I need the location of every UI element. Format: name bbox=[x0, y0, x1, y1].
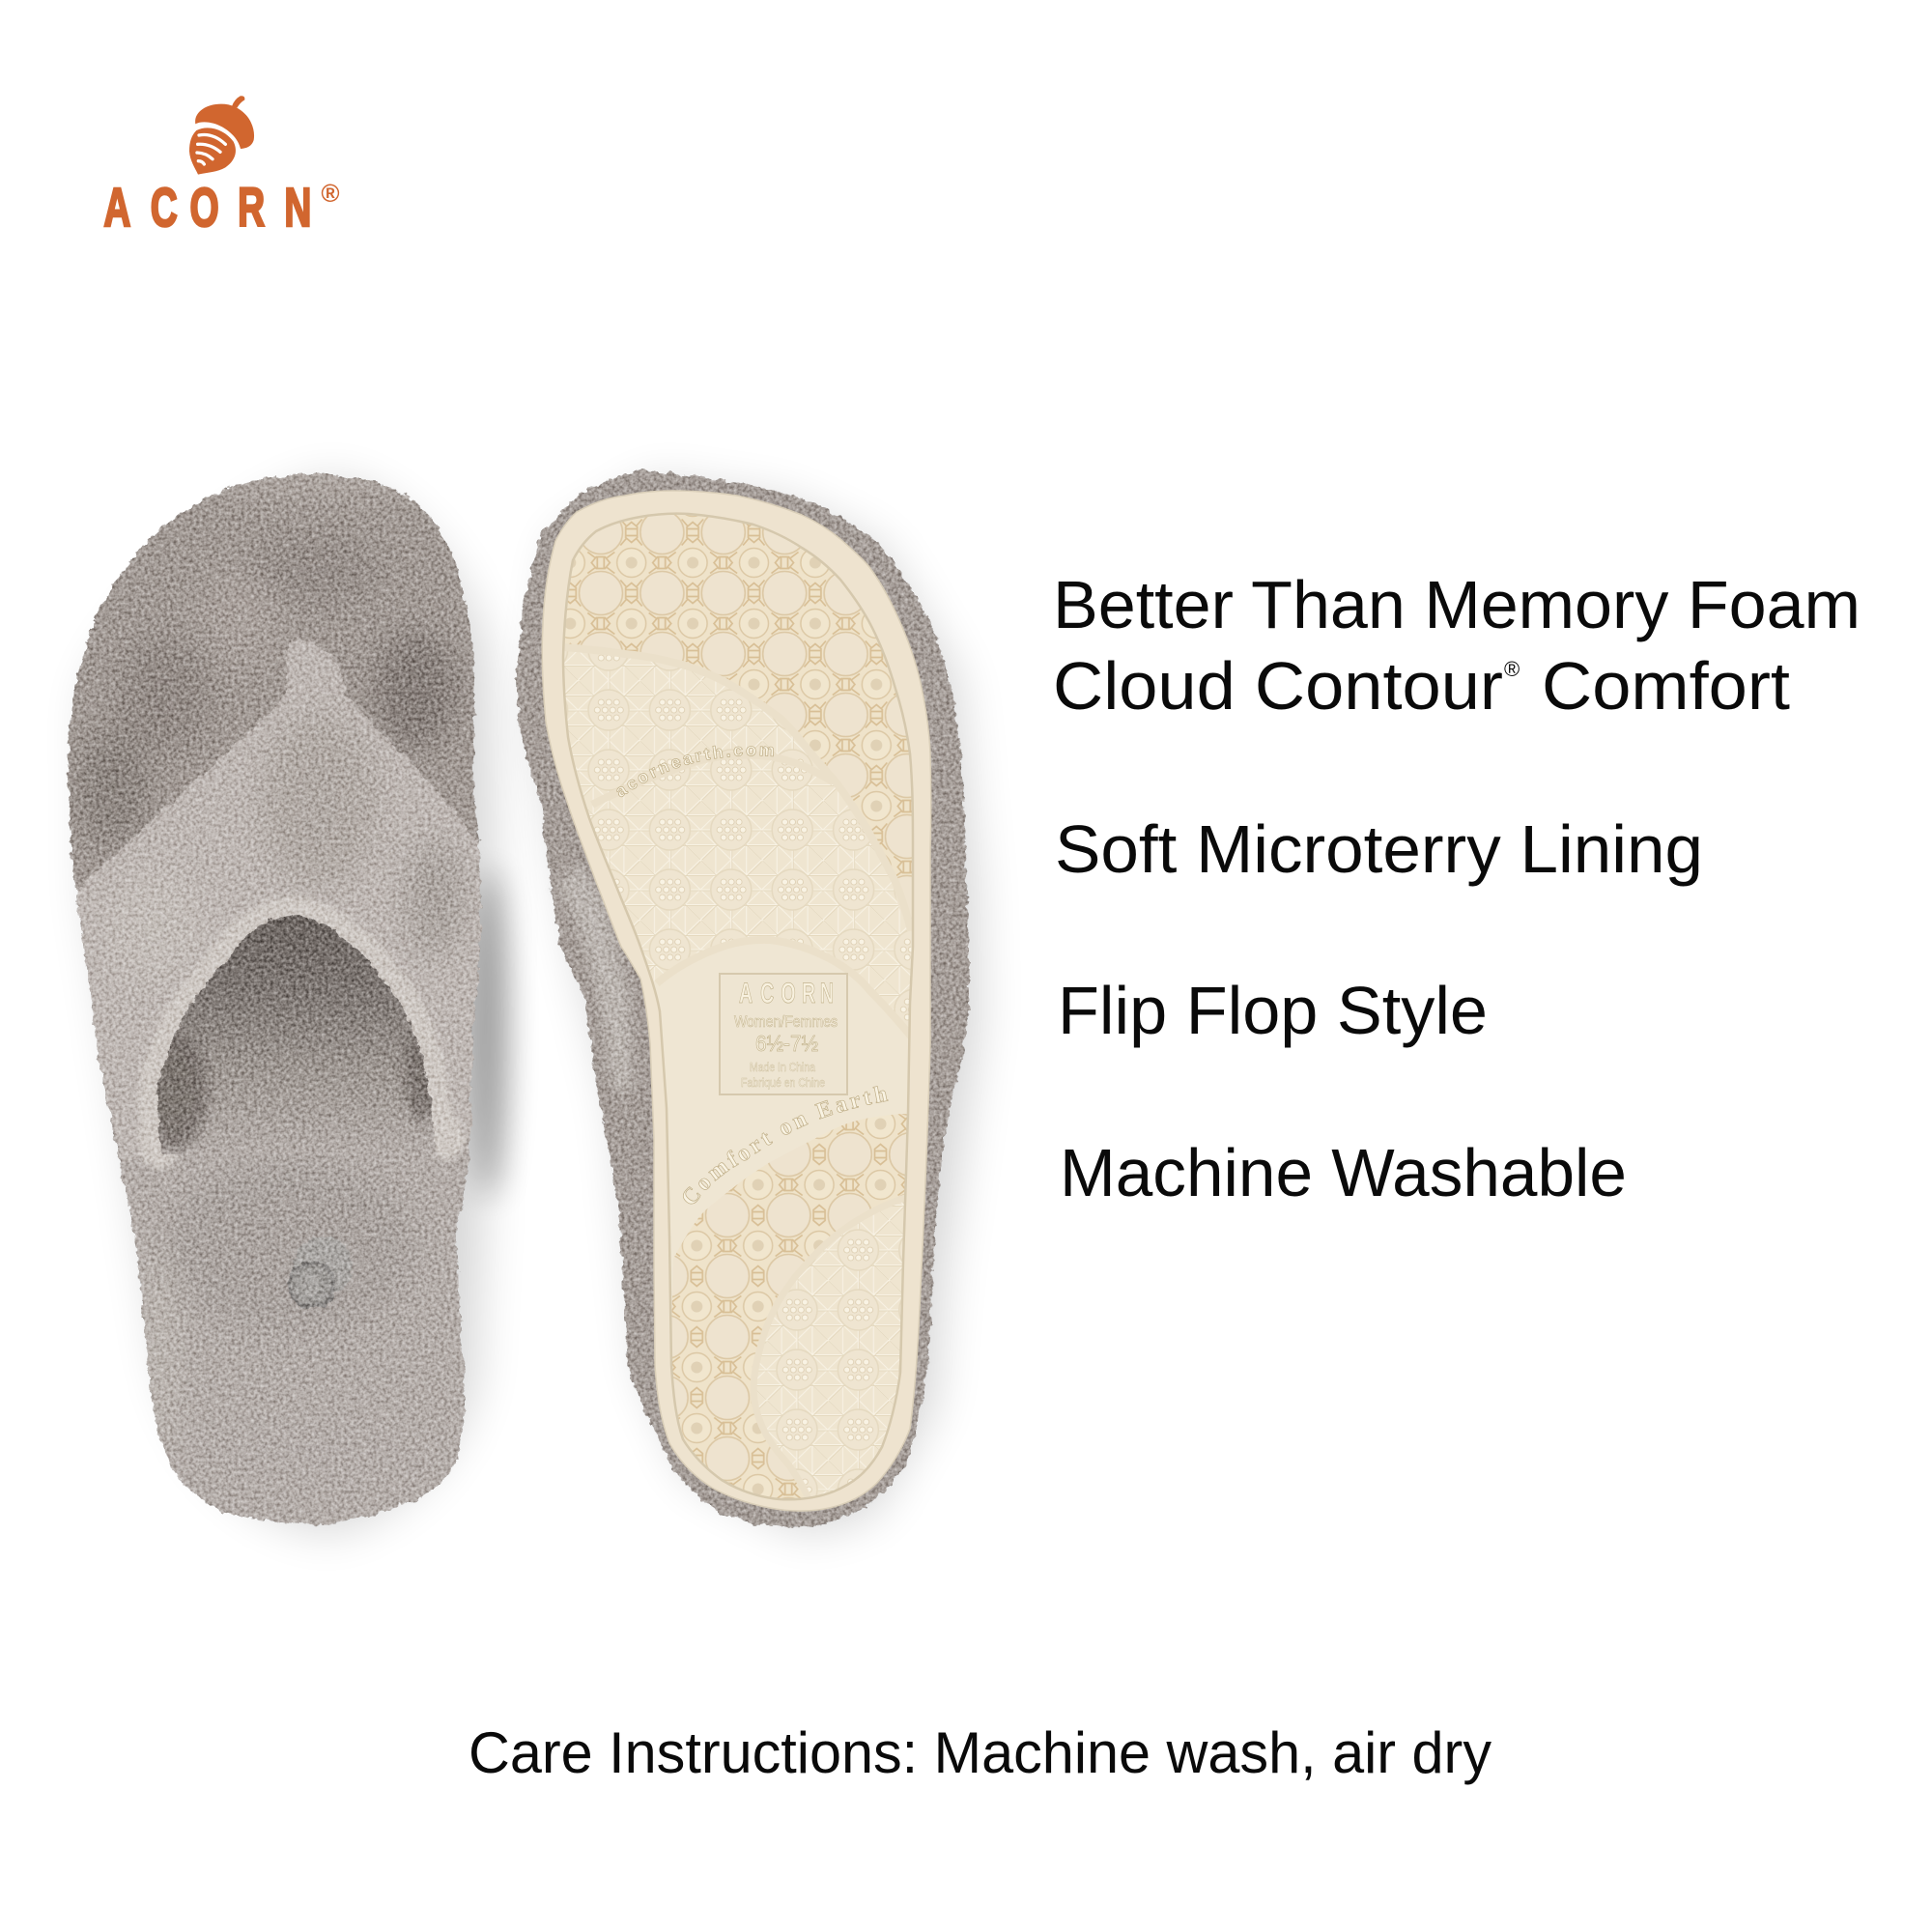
sole groove bbox=[563, 514, 913, 1499]
photo: slipper sole bbox=[514, 468, 997, 1546]
icon: acorn bbox=[189, 96, 254, 175]
tread divider arcs bbox=[563, 647, 913, 1038]
toe bed shading bbox=[78, 469, 456, 845]
care instructions: Care Instructions: Machine wash, air dry bbox=[469, 1720, 1492, 1785]
sole website text: acornearth.com bbox=[616, 746, 774, 798]
registered mark: ® bbox=[321, 179, 340, 208]
slipper body bbox=[68, 473, 481, 1524]
logo: Acorn bbox=[103, 96, 340, 239]
slipper shadow bbox=[90, 481, 497, 1532]
strap shading bbox=[146, 715, 469, 956]
sole size label bbox=[720, 974, 847, 1094]
label brand: ACORN bbox=[739, 978, 834, 1009]
label origin: Made In China bbox=[750, 1060, 816, 1074]
label gender: Women/Femmes bbox=[734, 1012, 838, 1031]
feature: cloud contour: Cloud Contour bbox=[1053, 648, 1503, 724]
opening side shading bbox=[140, 1024, 437, 1150]
heel tread circles bbox=[667, 1114, 913, 1517]
fur strap highlight bbox=[558, 865, 633, 1092]
sole rim bbox=[542, 491, 931, 1511]
feature list bbox=[1053, 567, 1861, 1210]
heel tread grid bbox=[753, 1197, 913, 1507]
footbed shading bbox=[142, 1167, 406, 1424]
wordmark: ACORN bbox=[103, 178, 311, 239]
feature: flip flop: Flip Flop Style bbox=[1058, 973, 1488, 1048]
strap rim bbox=[157, 916, 446, 1150]
sole shadow bbox=[535, 481, 980, 1533]
strap bbox=[58, 639, 483, 1164]
feature: washable: Machine Washable bbox=[1060, 1135, 1627, 1210]
sole tread bbox=[564, 515, 912, 1498]
footbed opening bbox=[157, 916, 437, 1154]
feature: cloud contour: ® bbox=[1504, 657, 1520, 681]
photo: slipper top view bbox=[58, 464, 508, 1532]
forefoot tread grid bbox=[551, 647, 913, 1038]
feature: microterry: Soft Microterry Lining bbox=[1055, 811, 1703, 887]
sole slogan text: Comfort on Earth bbox=[683, 1086, 889, 1204]
arch shadow bbox=[469, 869, 508, 1198]
label origin french: Fabriqué en Chine bbox=[741, 1075, 825, 1090]
embroidered acorn logo bbox=[286, 1261, 336, 1310]
feature: cloud contour: Comfort bbox=[1542, 648, 1790, 724]
feature: memory foam: Better Than Memory Foam bbox=[1053, 567, 1861, 642]
fur edge bbox=[519, 473, 966, 1525]
label size: 6½-7½ bbox=[755, 1031, 818, 1056]
toe bed bbox=[58, 464, 493, 918]
toe tread circles bbox=[565, 515, 912, 931]
